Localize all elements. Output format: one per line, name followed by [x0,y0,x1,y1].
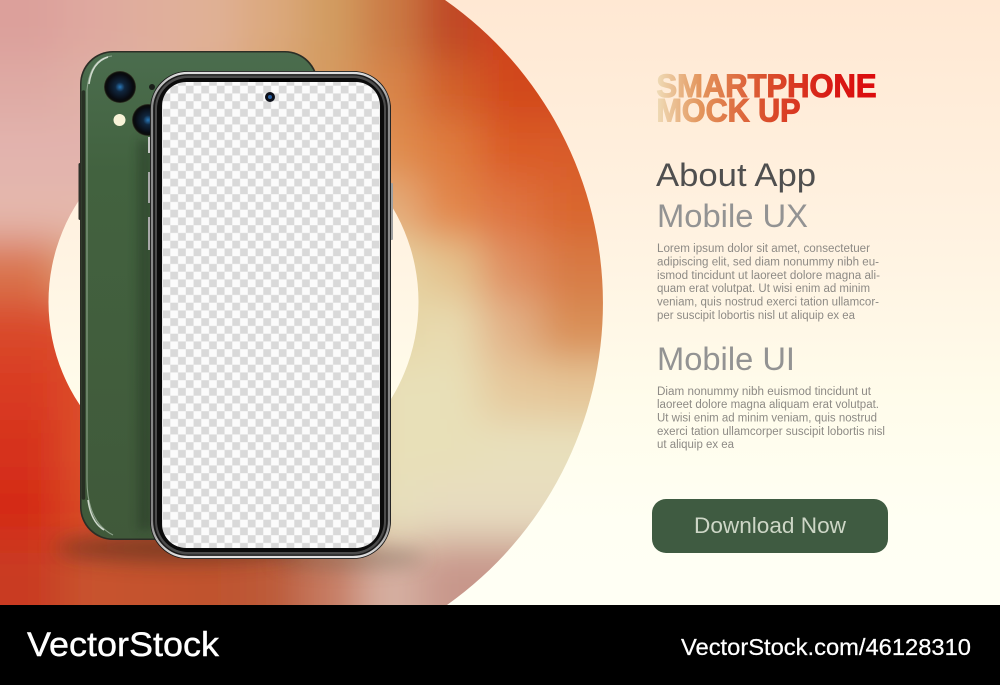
paragraph: Mobile UX: per suscipit lobortis nisl ut aliquip ex ea [657,310,856,322]
metal rim [152,73,389,557]
heading: Mobile UX: Mobile UX [657,198,808,234]
paragraph: Mobile UX [657,243,880,322]
edge highlight [87,56,113,535]
paragraph: Mobile UI: Diam nonummy nibh euismod tincidunt ut [657,386,872,398]
paragraph: Mobile UX: Lorem ipsum dolor sit amet, consectetuer [657,243,870,255]
phone back view [78,51,318,540]
main lens [104,71,136,103]
top speaker [249,79,290,82]
inner bezel [155,76,386,554]
paragraph: Mobile UX: adipiscing elit, sed diam nonummy nibh eu- [657,256,879,268]
gradient ring background [0,0,603,605]
paragraph: Mobile UX: quam erat volutpat. Ut wisi enim ad minim [657,283,870,295]
footer bar [0,605,1000,685]
title [656,68,876,128]
brand name: VectorStock [27,626,220,664]
title line 1: SMARTPHONE [656,68,876,104]
heading: About App: About App [656,157,816,193]
phone front view [148,71,393,559]
back body [80,51,318,540]
phone overlap shade [138,140,152,530]
outer frame [150,71,391,559]
paragraph: Mobile UI: ut aliquip ex ea [657,439,735,451]
paragraph: Mobile UI: exerci tation ullamcorper suscipit lobortis nisl [657,426,885,438]
image reference: VectorStock.com/46128310 [681,634,971,660]
title line 2: MOCK UP [656,92,800,128]
front camera [265,92,275,102]
phone shadow [55,534,425,568]
flash [114,114,126,126]
second lens [132,104,164,136]
paragraph: Mobile UI: laoreet dolore magna aliquam erat volutpat. [657,399,879,411]
paragraph: Mobile UX: veniam, quis nostrud exerci tation ullamcor- [657,296,879,308]
main artwork [0,0,888,605]
checker screen [162,82,380,548]
heading: Mobile UI: Mobile UI [657,341,795,377]
download button: Download Now [694,513,846,538]
microphone [149,84,155,90]
side button [78,163,82,220]
download button [652,499,888,553]
side buttons [148,137,151,153]
left dark strip [82,92,85,498]
paragraph: Mobile UX: ismod tincidunt ut laoreet dolore magna ali- [657,270,880,282]
paragraph: Mobile UI [657,386,885,451]
paragraph: Mobile UI: Ut wisi enim ad minim veniam, quis nostrud [657,412,877,424]
